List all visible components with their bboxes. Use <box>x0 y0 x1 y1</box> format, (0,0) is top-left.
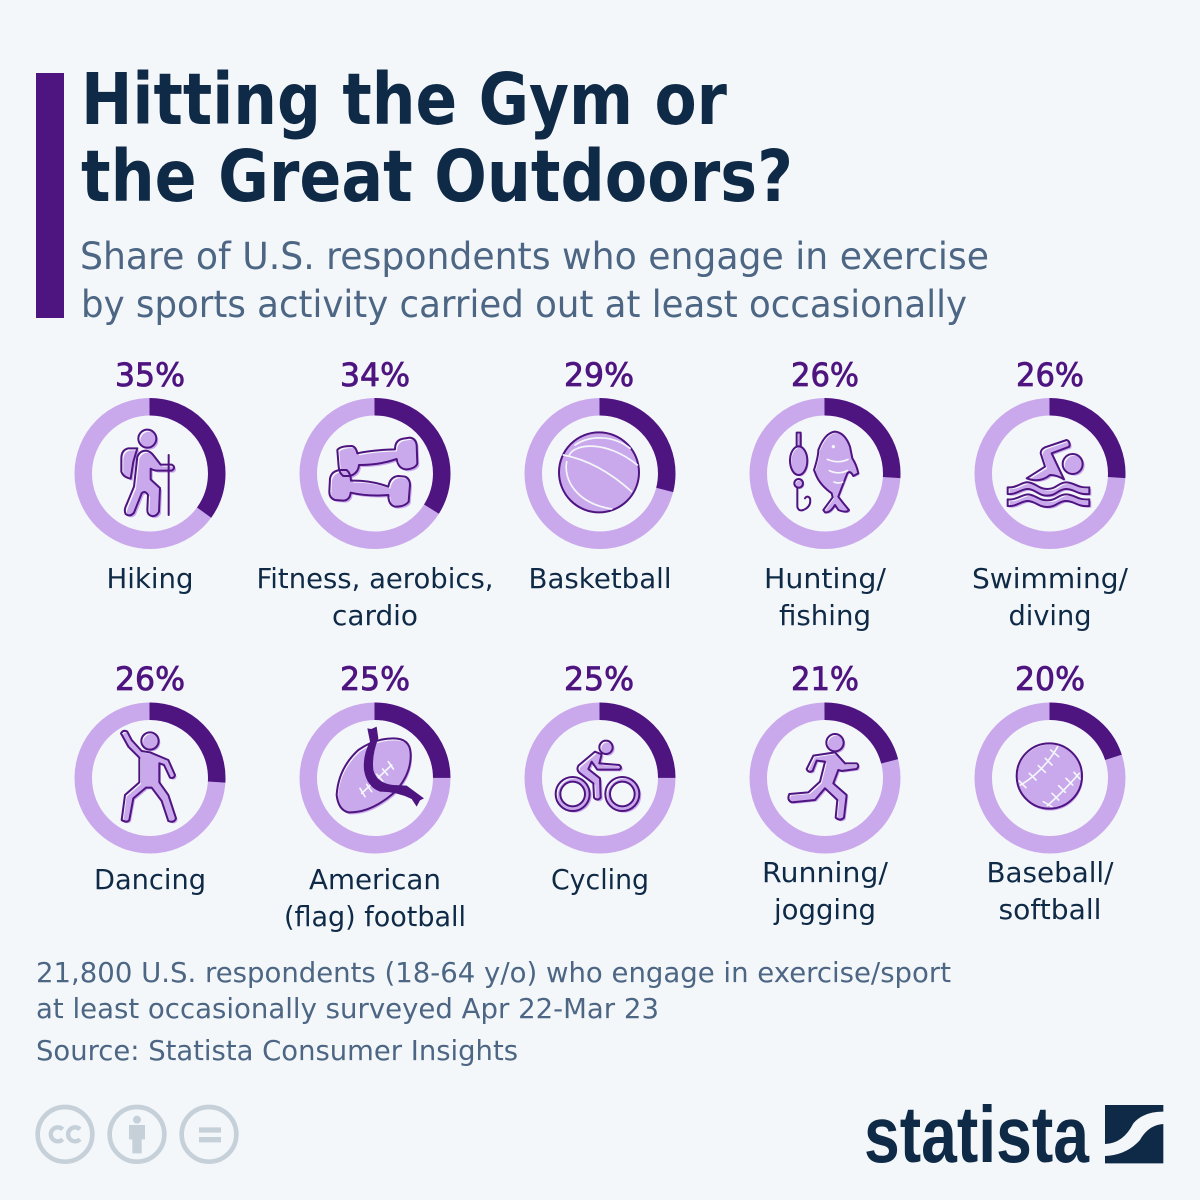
icon: basketball <box>559 432 639 512</box>
icon: hiker <box>121 430 176 518</box>
item: hiking 35% <box>83 356 217 595</box>
item: fitness 34%: 34% <box>340 356 410 394</box>
item: hiking 35%: 35% <box>115 356 185 394</box>
item: swimming 26%: Swimming/ <box>972 562 1129 595</box>
item: hunting 26% <box>758 356 892 632</box>
icon: swimmer <box>1008 440 1091 509</box>
item: baseball 20%: Baseball/ <box>986 856 1114 889</box>
item: baseball 20%: 20% <box>1015 660 1085 698</box>
item: basketball 29%: 29% <box>564 356 634 394</box>
accent bar <box>36 73 64 318</box>
item: fitness 34% <box>256 356 494 632</box>
item: running 21% <box>758 660 892 926</box>
item: running 21%: jogging <box>773 893 876 926</box>
item: swimming 26% <box>972 356 1129 632</box>
source: Source: Statista Consumer Insights <box>36 1034 518 1067</box>
item: football 25%: American <box>309 863 441 896</box>
survey note: 21,800 U.S. respondents (18-64 y/o) who engage in exercise/sport <box>36 956 951 989</box>
title: Hitting the Gym or <box>81 58 727 141</box>
item: hunting 26%: fishing <box>779 599 871 632</box>
icon: football and flag <box>337 727 424 814</box>
item: swimming 26%: diving <box>1008 599 1092 632</box>
item: fitness 34%: cardio <box>332 599 418 632</box>
subtitle <box>80 235 989 326</box>
item: football 25% <box>284 660 466 933</box>
item: dancing 26%: 26% <box>115 660 185 698</box>
item: swimming 26%: 26% <box>1016 356 1084 394</box>
item: dancing 26%: Dancing <box>94 863 206 896</box>
item: hiking 35%: Hiking <box>106 562 194 595</box>
item: basketball 29% <box>528 356 672 595</box>
item: cycling 25% <box>533 660 667 896</box>
item: cycling 25%: Cycling <box>551 863 649 896</box>
subtitle: Share of U.S. respondents who engage in exercise <box>80 235 989 278</box>
icon: dancer <box>121 731 178 823</box>
item: dancing 26% <box>83 660 217 896</box>
title <box>81 58 793 218</box>
survey note <box>36 956 951 1025</box>
item: running 21%: Running/ <box>762 856 889 889</box>
subtitle: by sports activity carried out at least occasionally <box>81 283 967 326</box>
item: football 25%: 25% <box>340 660 410 698</box>
item: baseball 20% <box>983 660 1117 926</box>
item: hunting 26%: Hunting/ <box>764 562 887 595</box>
item: running 21%: 21% <box>791 660 859 698</box>
icon: cyclist <box>556 741 641 813</box>
icon: dumbbells <box>329 438 419 509</box>
statista logo: statista <box>864 1090 1089 1179</box>
survey note: at least occasionally surveyed Apr 22-Mar 23 <box>36 992 659 1025</box>
item: fitness 34%: Fitness, aerobics, <box>256 562 494 595</box>
icon: fish and hook <box>790 432 860 514</box>
icon: runner <box>788 734 860 821</box>
title: the Great Outdoors? <box>81 135 793 218</box>
item: football 25%: (flag) football <box>284 900 466 933</box>
item: cycling 25%: 25% <box>564 660 634 698</box>
item: basketball 29%: Basketball <box>528 562 672 595</box>
licence icons <box>38 1107 236 1162</box>
item: baseball 20%: softball <box>998 893 1102 926</box>
icon: baseball <box>1017 743 1083 811</box>
item: hunting 26%: 26% <box>791 356 859 394</box>
